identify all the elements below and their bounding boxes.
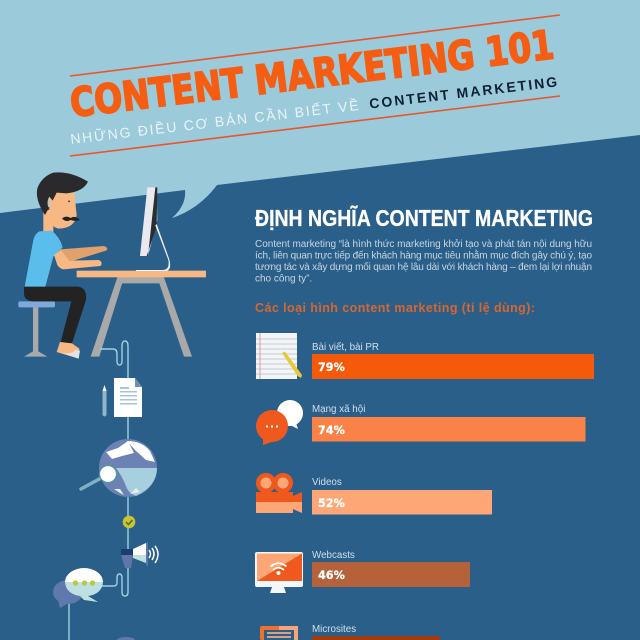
bar row: articles 79%: Bài viết, bài PR (312, 342, 379, 353)
bar row: microsites (260, 624, 440, 640)
icon: megaphone (121, 542, 158, 568)
bar row: webcasts 46% (255, 550, 470, 593)
bar row: webcasts 46%: 46% (318, 569, 345, 582)
text block: definition: cho công ty”. (255, 274, 312, 284)
subtitle (69, 73, 558, 147)
bar row: microsites: Microsites (312, 624, 356, 635)
face (49, 190, 77, 229)
icon: next globe top (117, 637, 135, 640)
shoe (57, 342, 79, 359)
stool (24, 307, 47, 357)
bar row: videos 52%: Videos (312, 477, 342, 488)
icon: globe with magnifier (81, 439, 157, 497)
bar row: social media 74%: 74% (318, 424, 345, 437)
bar row: videos 52%: 52% (318, 497, 345, 510)
icon: speech bubbles (256, 400, 303, 445)
bar row: webcasts 46%: Webcasts (312, 550, 355, 561)
icon: notebook and pencil (256, 333, 302, 379)
bar row: articles 79%: 79% (318, 361, 345, 374)
desk top (77, 271, 206, 277)
bar row: videos 52% (256, 473, 492, 514)
icon: document and pen (102, 378, 142, 417)
monitor (140, 187, 157, 256)
neck and back arm (43, 210, 53, 235)
text block: definition: tương tác và xây dựng mối quan hệ lâu dài với khách hàng – đem lại lợi nhuận (255, 261, 592, 273)
trousers (24, 287, 86, 343)
text block: definition: Content marketing “là hình thức marketing khởi tạo và phát tán nội dung hữu (255, 238, 592, 250)
subtitle: dark part: CONTENT MARKETING (368, 73, 558, 112)
bar row: social media 74%: Mạng xã hội (312, 404, 365, 415)
hair (37, 172, 88, 215)
subheading: content types: Các loại hình content marketing (tỉ lệ dùng): (255, 301, 535, 315)
desk legs (91, 277, 192, 357)
shirt (25, 231, 63, 287)
title banner (68, 15, 560, 156)
icon: microsite window (260, 626, 298, 640)
icon: movie camera (256, 473, 302, 513)
bar row: social media 74% (256, 400, 586, 445)
text block: definition (255, 238, 592, 284)
cable line connecting icons (69, 341, 128, 640)
icon: check badge (123, 516, 135, 528)
text block: definition: ích, liên quan trực tiếp đến khách hàng mục tiêu nhằm mục đích gây chú ý, tạo (255, 248, 592, 262)
subtitle: light part: NHỮNG ĐIỀU CƠ BẢN CẦN BIẾT VỀ (69, 97, 359, 147)
front arm (54, 250, 102, 269)
icon: monitor with wifi (255, 552, 303, 593)
illustration: man at computer desk (18, 172, 206, 359)
icon: chat bubbles (53, 568, 103, 608)
bar row: articles 79% (256, 333, 594, 379)
moustache (62, 217, 80, 221)
